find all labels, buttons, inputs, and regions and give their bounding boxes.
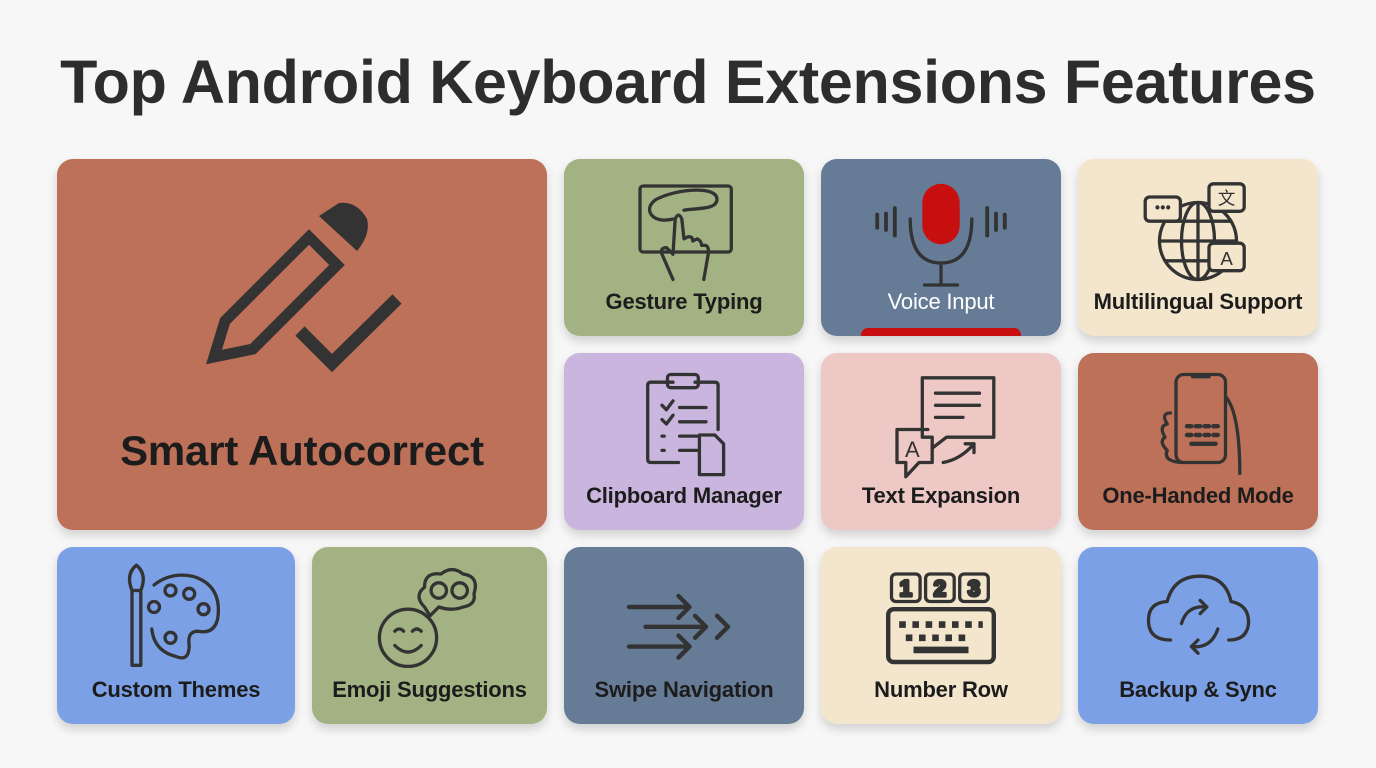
icon: speech bubbles (895, 376, 996, 478)
icon: pencil with check (206, 202, 402, 372)
label: One-Handed Mode (1102, 483, 1294, 508)
panel: backup & sync (1078, 547, 1318, 724)
label: Multilingual Support (1094, 289, 1302, 314)
panel: voice input (821, 159, 1061, 336)
panel: emoji suggestions (312, 547, 547, 724)
icon: globe with speech bubbles (1144, 182, 1246, 282)
label: Smart Autocorrect (120, 427, 484, 474)
icon: hand holding phone (1160, 372, 1242, 476)
panel: swipe navigation (564, 547, 804, 724)
icon: clipboard (646, 372, 726, 476)
panel: multilingual support (1078, 159, 1318, 336)
icon: globe with speech bubbles: 文 (1218, 186, 1235, 211)
icon: globe with speech bubbles: A (1220, 248, 1233, 269)
icon: speech bubbles: A (905, 437, 920, 462)
title: Top Android Keyboard Extensions Features (60, 48, 1316, 116)
label: Gesture Typing (606, 289, 762, 314)
icon: cloud sync (1146, 574, 1250, 655)
label: Voice Input (888, 289, 994, 314)
icon: keyboard with numbers: 3 (968, 576, 980, 601)
panel: one-handed mode (1078, 353, 1318, 530)
icon: keyboard with numbers: 2 (934, 576, 946, 601)
label: Backup & Sync (1119, 677, 1277, 702)
label: Emoji Suggestions (332, 677, 527, 702)
icon: arrows (626, 594, 730, 660)
icon: keyboard with numbers (886, 572, 996, 664)
icon: globe with speech bubbles: ••• (1155, 199, 1171, 216)
panel: text expansion (821, 353, 1061, 530)
icon: brush and palette (128, 564, 220, 667)
panel: custom themes (57, 547, 295, 724)
icon: microphone (875, 184, 1007, 287)
label: Swipe Navigation (595, 677, 773, 702)
label: Number Row (874, 677, 1008, 702)
icon: gesture (638, 184, 733, 282)
panel: smart autocorrect (57, 159, 547, 530)
icon: smiley with emoji bubble (378, 568, 477, 668)
panel: clipboard manager (564, 353, 804, 530)
icon: keyboard with numbers: 1 (900, 576, 912, 601)
label: Clipboard Manager (586, 483, 782, 508)
panel: number row (821, 547, 1061, 724)
label: Text Expansion (862, 483, 1020, 508)
label: Custom Themes (92, 677, 260, 702)
panel: gesture typing (564, 159, 804, 336)
